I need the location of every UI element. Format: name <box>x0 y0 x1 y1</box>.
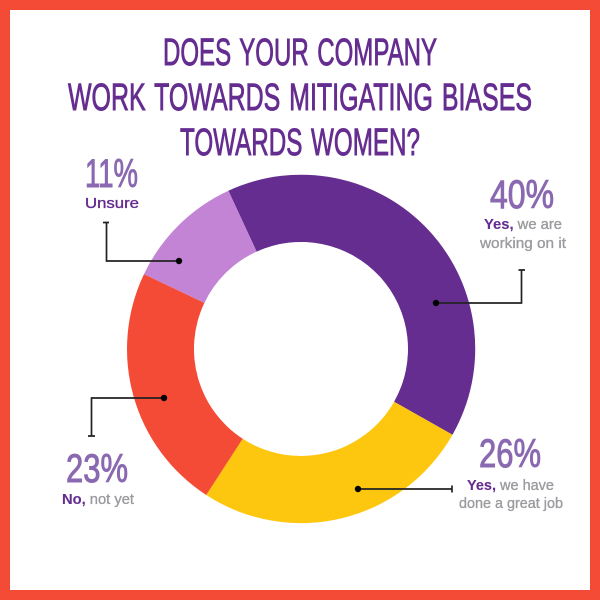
callout: yes, working on it 40% <box>479 173 566 252</box>
callout: no, not yet 23%: 23% <box>66 447 128 491</box>
segment: yes, working on it 40% <box>228 175 475 435</box>
callout: no, not yet 23%: No, not yet <box>62 492 134 508</box>
callout: yes, working on it 40%: working on it <box>479 236 566 252</box>
callout: yes, great job 26%: done a great job <box>459 496 563 512</box>
leader line: no, not yet <box>88 395 167 436</box>
title <box>68 32 532 164</box>
segment: yes, great job 26% <box>206 402 452 523</box>
leader line: unsure <box>103 222 182 264</box>
callout: no, not yet 23% <box>62 447 134 508</box>
callout: unsure 11%: Unsure <box>85 196 139 212</box>
title: TOWARDS WOMEN? <box>180 122 420 164</box>
title: DOES YOUR COMPANY <box>163 32 437 74</box>
segment: no, not yet 23% <box>127 274 243 495</box>
callout: yes, great job 26% <box>459 432 563 512</box>
donut chart <box>127 175 475 523</box>
callout: yes, working on it 40%: 40% <box>490 173 554 217</box>
callout: yes, great job 26%: 26% <box>479 432 541 476</box>
callout: unsure 11%: 11% <box>85 152 138 196</box>
segment: unsure 11% <box>144 191 257 303</box>
leader line: yes, working on it <box>433 270 525 306</box>
callout: yes, great job 26%: Yes, we have <box>467 478 554 494</box>
leader line: yes, great job <box>355 486 452 492</box>
callout: yes, working on it 40%: Yes, we are <box>484 217 562 233</box>
callout: unsure 11% <box>85 152 139 212</box>
